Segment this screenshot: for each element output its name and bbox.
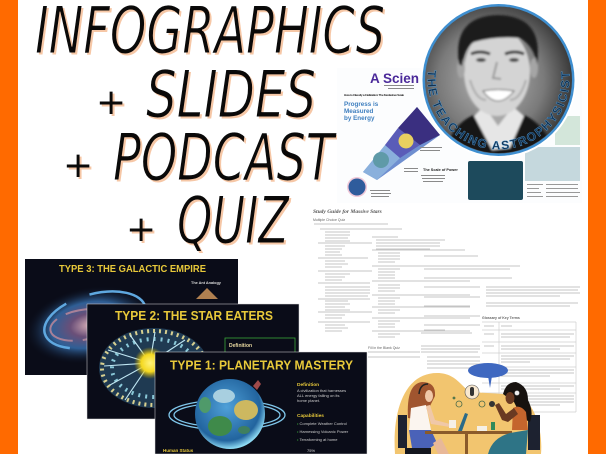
title: + podcast [63, 121, 339, 198]
multiple choice heading: Multiple Choice Quiz [313, 218, 345, 222]
ocean panel [468, 161, 523, 200]
title: + quiz: + [126, 209, 156, 250]
progress heading: Measured [344, 108, 374, 115]
icon: microphone bubble [465, 385, 479, 399]
capabilities list: • Complete Weather Control [297, 421, 347, 426]
slide title: TYPE 3: THE GALACTIC EMPIRE [59, 263, 206, 275]
question columns [314, 224, 580, 368]
podcast illustration [395, 363, 541, 454]
human status label: Human Status [163, 448, 194, 453]
icon: headset [514, 390, 520, 396]
slide title: TYPE 1: PLANETARY MASTERY [170, 358, 354, 372]
green panel [555, 116, 580, 145]
title: + quiz [126, 184, 292, 261]
energy cone [347, 107, 440, 197]
icon: ant hill [196, 288, 218, 299]
study guide heading: Study Guide for Massive Stars [313, 209, 382, 215]
definition text [297, 382, 346, 403]
title: + slides: SLIDES [146, 58, 316, 133]
capabilities list: • Terraforming at home [297, 437, 338, 442]
key terms heading: Glossary of Key Terms [482, 316, 520, 320]
tier captions [370, 85, 445, 197]
glossary table [482, 322, 576, 412]
slide: type 3 galactic empire [18, 259, 238, 375]
table [425, 413, 512, 454]
table rows [527, 184, 580, 197]
speech bubble [468, 363, 508, 388]
title: + slides: SLIDES [148, 60, 318, 135]
left podcaster [398, 382, 450, 454]
infographic collage [337, 68, 582, 203]
badge text: THE TEACHING ASTROPHYSICIST [427, 70, 570, 150]
definition box [225, 338, 295, 358]
definition label: Definition [229, 343, 252, 349]
title: + podcast: + [65, 147, 95, 188]
title: + quiz: + [128, 211, 158, 252]
infographic background [337, 68, 582, 203]
percent: 75% [307, 448, 315, 453]
portrait badge [422, 4, 574, 156]
capabilities list: • Harnessing Volcanic Power [297, 429, 349, 434]
yellow background blob [395, 373, 541, 454]
title: + quiz: QUIZ [179, 186, 292, 261]
definition text: Definition [297, 382, 319, 388]
portrait: man [450, 14, 547, 153]
icon: phone [489, 401, 495, 407]
slide: type 1 planetary mastery [155, 352, 367, 454]
right orange border [588, 0, 606, 454]
ant analogy label: The Ant Analogy [191, 281, 222, 285]
slide: type 2 star eaters [87, 304, 299, 419]
earth globe [195, 379, 265, 449]
capabilities list: Capabilities [297, 413, 324, 419]
title: + podcast: PODCAST [115, 123, 339, 198]
icon: floating audio symbols [453, 397, 485, 407]
short answer heading: Fill in the Blank Quiz [368, 346, 400, 350]
right podcaster [488, 382, 540, 454]
capabilities list [297, 413, 349, 442]
title: + slides: + [96, 82, 126, 123]
cloud panel [525, 147, 580, 181]
title: + quiz: QUIZ [177, 184, 290, 259]
title: + slides [96, 58, 318, 135]
title: + slides: + [98, 84, 128, 125]
orbit rings [169, 400, 285, 430]
definition text: ALL energy falling on its [297, 393, 340, 398]
definition text: A civilization that harnesses [297, 388, 346, 393]
galaxy [18, 276, 162, 374]
scale of power label: The Scale of Power [423, 168, 458, 172]
progress heading: by Energy [344, 115, 375, 122]
infographic subtitle: How to Classify a Civilization: The Kardashev Scale [344, 93, 404, 97]
dyson swarm [99, 328, 209, 408]
title: + podcast: + [63, 145, 93, 186]
left orange border [0, 0, 18, 454]
definition text: home planet. [297, 398, 320, 403]
slide title: TYPE 2: THE STAR EATERS [115, 309, 273, 323]
study guide document [305, 203, 588, 412]
title: + podcast: PODCAST [113, 121, 337, 196]
progress heading: Progress is [344, 101, 379, 108]
icon: headset [419, 384, 428, 394]
infographic heading: A Scien [370, 71, 419, 86]
